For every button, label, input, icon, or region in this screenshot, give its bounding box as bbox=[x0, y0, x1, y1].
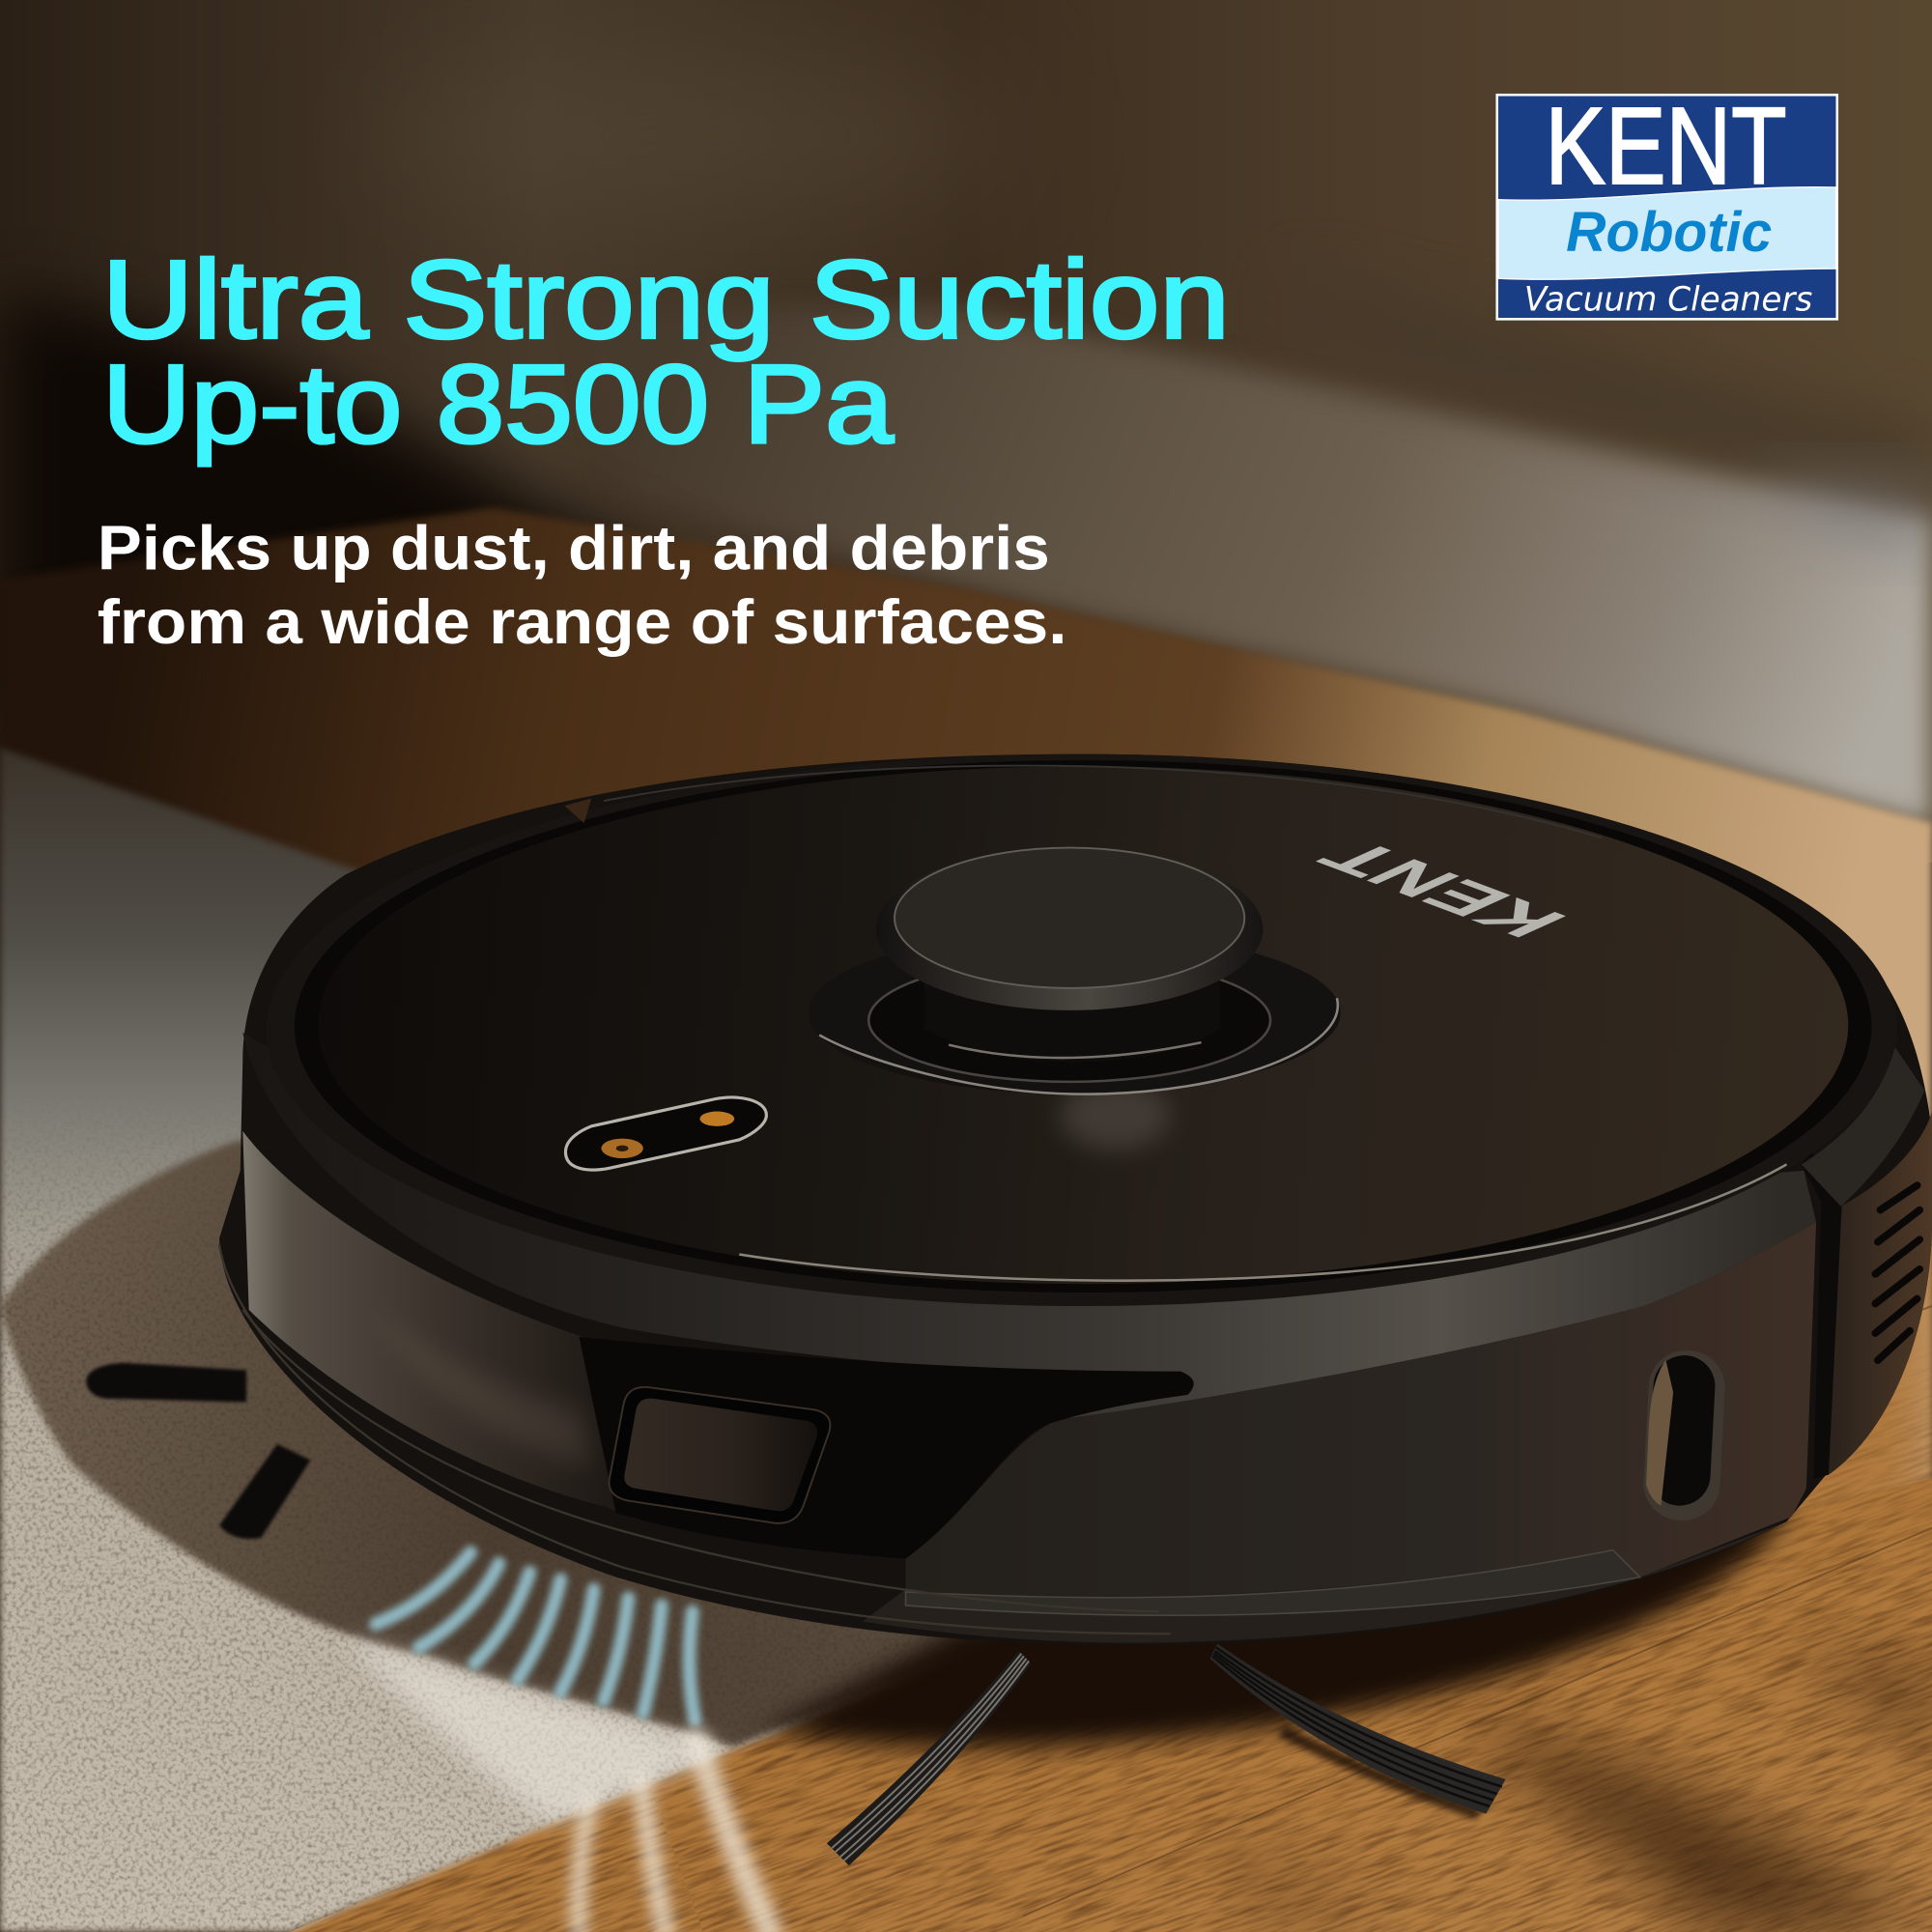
lidar opening bbox=[868, 958, 1270, 1082]
background: room wall and baseboard bbox=[0, 0, 1932, 863]
right side block bbox=[1829, 1112, 1932, 1475]
suction airflow streaks bbox=[376, 1552, 770, 1932]
logo light wave band bbox=[1498, 187, 1836, 279]
logo Vacuum Cleaners: Vacuum Cleaners bbox=[1524, 280, 1812, 319]
robot vacuum bbox=[219, 754, 1932, 1645]
logo frame bbox=[1495, 94, 1838, 321]
rug with cleaned and uncleaned areas bbox=[0, 748, 1010, 1932]
headline line 1: Ultra Strong Suction bbox=[102, 238, 1230, 361]
lidar base plate bbox=[809, 931, 1341, 1094]
bumper reflection bbox=[370, 1306, 591, 1466]
logo KENT: KENT bbox=[1545, 85, 1786, 208]
shadow under robot bbox=[764, 1509, 1793, 1747]
headline bbox=[102, 238, 1230, 467]
lidar tower bbox=[809, 848, 1341, 1094]
subheading bbox=[98, 512, 1067, 657]
control buttons bbox=[565, 1097, 766, 1170]
left brush bbox=[86, 1363, 246, 1403]
lower strip bbox=[906, 1550, 1640, 1615]
lidar neck bbox=[924, 961, 1220, 1062]
vent slats bbox=[1875, 1185, 1919, 1360]
lidar cap side bbox=[876, 848, 1263, 1010]
logo Robotic: Robotic bbox=[1566, 201, 1772, 264]
rim channel bbox=[295, 760, 1872, 1293]
front window sensor bbox=[609, 1387, 830, 1523]
glossy front bumper bbox=[242, 1131, 640, 1521]
rim notch bbox=[564, 799, 591, 823]
right lower body panel bbox=[906, 1222, 1816, 1595]
right brush bbox=[1210, 1644, 1506, 1814]
lidar cap top bbox=[895, 848, 1244, 988]
robot body silhouette bbox=[219, 754, 1932, 1645]
oval sensor hole bbox=[1642, 1349, 1727, 1522]
side brushes bbox=[86, 1363, 1506, 1865]
rim top highlight bbox=[604, 766, 1602, 838]
centre brush bbox=[827, 1651, 1032, 1865]
KENT Robotic Vacuum Cleaners logo bbox=[1495, 85, 1838, 321]
outer top rim bbox=[267, 754, 1897, 1306]
bottom skirt bbox=[863, 1521, 1786, 1643]
top disc bbox=[318, 766, 1848, 1284]
lower bumper lines bbox=[219, 1244, 1171, 1634]
blue air streaks on rug bbox=[376, 1552, 695, 1720]
subheading line 2: from a wide range of surfaces. bbox=[98, 586, 1067, 657]
lower left brush bbox=[219, 1444, 310, 1539]
KENT brand mark on robot: KENT bbox=[1300, 833, 1586, 946]
black recess bbox=[579, 1337, 1194, 1559]
floor: wood planks bbox=[0, 508, 1932, 1932]
subheading line 1: Picks up dust, dirt, and debris bbox=[98, 512, 1050, 582]
white air streaks on floor bbox=[579, 1740, 770, 1932]
headline line 2: Up-to 8500 Pa bbox=[102, 343, 894, 467]
lidar reflection bbox=[1060, 1081, 1171, 1150]
dark seam bbox=[1802, 1152, 1842, 1479]
disc highlight edge bbox=[739, 1164, 1786, 1281]
upper grey band bbox=[242, 1033, 1816, 1419]
